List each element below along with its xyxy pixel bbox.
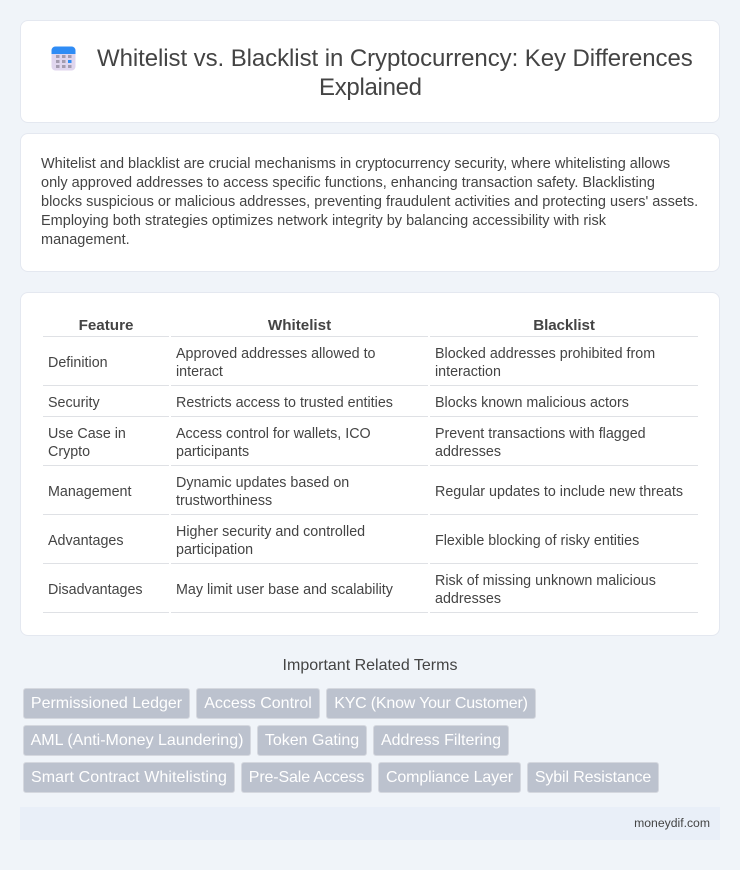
row: disadvantages xyxy=(48,573,656,607)
row: disadvantages: Risk of missing unknown malicious xyxy=(435,573,656,589)
row: definition: Definition xyxy=(48,355,108,371)
row: definition xyxy=(48,346,655,380)
panel: intro xyxy=(20,133,720,272)
row: definition: Blocked addresses prohibited from xyxy=(435,346,655,362)
row: security: Restricts access to trusted entities xyxy=(176,395,393,411)
footer source: moneydif.com xyxy=(634,816,710,830)
heading: related terms: Important Related Terms xyxy=(283,657,457,674)
tag group: related terms: Access Control xyxy=(204,695,312,712)
table header: Blacklist xyxy=(533,317,595,334)
intro paragraph xyxy=(41,156,698,248)
tag group: related terms: Permissioned Ledger xyxy=(31,695,182,712)
row: use case: Prevent transactions with flagged xyxy=(435,426,646,442)
title: Explained xyxy=(319,74,422,101)
row: use case: Use Case in xyxy=(48,426,126,442)
row: security xyxy=(48,395,629,411)
tag group: related terms: Pre-Sale Access xyxy=(249,769,364,786)
row: disadvantages: Disadvantages xyxy=(48,582,143,598)
tag group: related terms: Token Gating xyxy=(265,732,359,749)
intro paragraph: Employing both strategies optimizes network integrity by balancing accessibility with risk xyxy=(41,213,606,229)
intro paragraph: only approved addresses to access specific functions, enhancing transaction safety. Blacklisting xyxy=(41,175,655,191)
intro paragraph: Whitelist and blacklist are crucial mechanisms in cryptocurrency security, where whitelisting allows xyxy=(41,156,670,172)
row: advantages: Higher security and controlled xyxy=(176,524,365,540)
tag group: related terms: AML (Anti-Money Laundering) xyxy=(31,732,243,749)
row: security: Security xyxy=(48,395,100,411)
row: use case: addresses xyxy=(435,444,501,460)
panel: title card xyxy=(20,20,720,123)
row: management: trustworthiness xyxy=(176,493,272,509)
row: use case xyxy=(48,426,646,460)
row: management: Management xyxy=(48,484,131,500)
row: use case: participants xyxy=(176,444,249,460)
row: management: Dynamic updates based on xyxy=(176,475,349,491)
table header: Whitelist xyxy=(268,317,331,334)
intro paragraph: blocks suspicious or malicious addresses, preventing fraudulent activities and protecting users' assets. xyxy=(41,194,698,210)
row: definition: interact xyxy=(176,364,223,380)
table header: Feature xyxy=(79,317,133,334)
row: advantages: Advantages xyxy=(48,533,124,549)
panel: comparison table xyxy=(20,292,720,636)
tag group: related terms: KYC (Know Your Customer) xyxy=(334,695,528,712)
row: disadvantages: May limit user base and scalability xyxy=(176,582,393,598)
row: disadvantages: addresses xyxy=(435,591,501,607)
icon: calendar xyxy=(52,46,76,70)
row: advantages xyxy=(48,524,639,558)
tag group: related terms: Compliance Layer xyxy=(386,769,513,786)
row: management xyxy=(48,475,683,509)
row: use case: Crypto xyxy=(48,444,90,460)
row: management: Regular updates to include new threats xyxy=(435,484,683,500)
row: advantages: participation xyxy=(176,542,253,558)
intro paragraph: management. xyxy=(41,232,130,248)
row: definition: interaction xyxy=(435,364,501,380)
tag group: related terms: Sybil Resistance xyxy=(535,769,651,786)
row: security: Blocks known malicious actors xyxy=(435,395,629,411)
tag group: related terms: Address Filtering xyxy=(381,732,501,749)
row: definition: Approved addresses allowed to xyxy=(176,346,376,362)
footer xyxy=(20,807,720,840)
tag group: related terms xyxy=(23,688,659,793)
row: advantages: Flexible blocking of risky entities xyxy=(435,533,639,549)
tag group: related terms: Smart Contract Whitelisting xyxy=(31,769,227,786)
title: Whitelist vs. Blacklist in Cryptocurrency: Key Differences xyxy=(97,45,693,72)
row: use case: Access control for wallets, ICO xyxy=(176,426,371,442)
title xyxy=(97,45,693,101)
table header xyxy=(79,317,595,334)
